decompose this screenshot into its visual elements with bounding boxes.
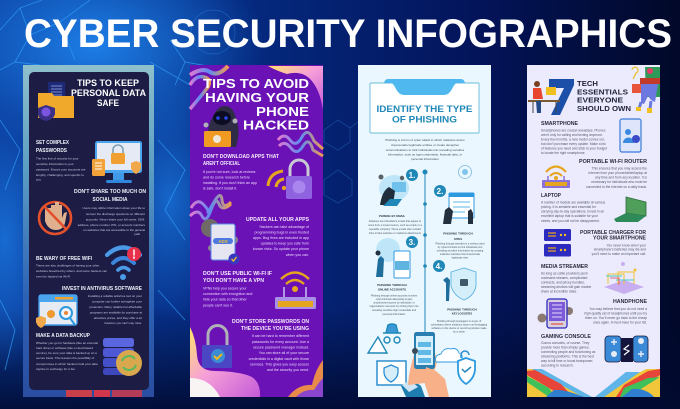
- icon: folder with shield: [38, 82, 74, 121]
- text: update all your apps: apps. Bug fixes are included in app: [253, 236, 309, 240]
- text: phishing definition: impersonate legitimate entities or create deceptive: [391, 143, 459, 147]
- icon: router: [275, 272, 316, 309]
- text: update all your apps: updates to keep you safe from: [261, 242, 309, 246]
- step 4: phishing through keyloggers: [431, 260, 488, 334]
- item: laptop: pricing. It is sensible and essential for: [541, 205, 597, 209]
- item: smartphone: aren't only for calling and texting anymore.: [541, 133, 603, 137]
- text: be wary of free wifi: These are also challenges of having your other: [36, 264, 99, 268]
- text: phishing definition: information, such as login credentials, financial data, or: [388, 152, 462, 156]
- text: don't use public wi-fi: DON'T USE PUBLIC WI-FI IF: [203, 271, 273, 277]
- text: don't use public wi-fi: hide your data so that other: [203, 298, 248, 302]
- text: set complex passwords: sensitive information is your: [36, 162, 74, 166]
- item: smartphone: of features you need and stick to your budget: [541, 146, 607, 150]
- item: laptop: carrying day-to-day operations. Invest in an: [541, 210, 604, 214]
- step 1: phishing by email: 1.: [409, 171, 415, 180]
- text: set complex passwords: you.: [36, 178, 42, 182]
- item: handphone: HANDPHONE: [613, 299, 648, 305]
- text: don't share too much on social media: Users may utilize information about your life to: [82, 206, 145, 210]
- step 3: phishing through online accounts: revealing sensitive login credentials and: [372, 309, 417, 312]
- step 1: phishing by email: [368, 169, 422, 235]
- step 4: phishing through keyloggers: cyberattack where malicious actors use keylogging: [431, 324, 488, 326]
- title frame: OF PHISHING: [392, 114, 457, 126]
- text: update all your apps: programming bugs in even trusted: [254, 230, 309, 234]
- text: don't share too much on social media: SOCIAL MEDIA: [92, 197, 128, 203]
- icon: media streamer illustration: [604, 262, 644, 294]
- text: don't download apps: installing. If you don't think an app: [203, 181, 257, 185]
- item: handphone: high-quality set of headphones until you try: [584, 312, 647, 316]
- item: gaming console: way to kill time or boost brainpower,: [541, 359, 593, 363]
- heading: panel 1 title: TIPS TO KEEP: [77, 78, 140, 89]
- text: don't store passwords: You can store all of your secure: [259, 351, 309, 355]
- step 1: phishing by email: come from a trusted source, such as a bank or a: [368, 224, 422, 227]
- step 4: phishing through keyloggers: PHISHING THROUGH: [447, 308, 477, 312]
- text: don't use public wi-fi: [203, 271, 273, 308]
- item: media streamer: contracts, and pricey bundles,: [541, 280, 585, 284]
- title frame: IDENTIFY THE TYPE: [376, 104, 472, 115]
- item: portable wi-fi router: [579, 159, 647, 189]
- text: don't share too much on social media: recover the discharge questions on different: [86, 212, 145, 216]
- item: laptop: [541, 193, 605, 223]
- item: gaming console: Gonna consoles, of course. They: [541, 341, 590, 345]
- step 1: phishing by email: Attackers send fraudulent emails that appear to: [369, 220, 422, 223]
- decoration: bottom blobs: [190, 327, 323, 397]
- panel: 7 tech essentials: [527, 65, 660, 397]
- text: don't share too much on social media: [74, 189, 146, 236]
- step 2: phishing through sites: revealing sensitive information by creating: [437, 250, 484, 252]
- text: set complex passwords: PASSWORDS: [36, 148, 68, 154]
- icon: big seven with person at desk: [528, 79, 574, 115]
- item: smartphone: Every few months, a new model comes out,: [541, 138, 605, 142]
- text: don't share too much on social media: path.: [134, 232, 141, 236]
- item: gaming console: [541, 334, 596, 368]
- icon: target: [458, 166, 472, 178]
- item: portable charger: smartphone's batteries may die and: [594, 248, 646, 252]
- item: media streamer: [541, 264, 591, 294]
- text: make a data backup: compromises in which hackers hold your data: [36, 362, 98, 366]
- text: update all your apps: known risks. So update your phone: [253, 247, 309, 251]
- text: set complex passwords: lengthy, challenging, and specific to: [36, 173, 84, 177]
- icon: router: [542, 166, 570, 188]
- text: don't use public wi-fi: people can't see it.: [203, 304, 233, 308]
- step 2: phishing through sites: 2.: [437, 187, 443, 196]
- title frame: [370, 79, 479, 133]
- heading: tech essentials title: SHOULD OWN: [577, 106, 631, 113]
- timeline: [422, 170, 428, 334]
- text: don't share too much on social media: address, phone number, PIN, or account numbers: [78, 223, 145, 227]
- text: be wary of free wifi: [36, 256, 107, 278]
- heading: panel 1 title: [71, 78, 146, 109]
- icon: game console: [605, 336, 648, 362]
- item: gaming console: GAMING CONSOLE: [541, 334, 592, 340]
- item: portable charger: [580, 230, 647, 256]
- step 4: phishing through keyloggers: KEYLOGGERS: [452, 312, 472, 316]
- text: don't store passwords: credentials in a digital vault with those: [249, 357, 309, 361]
- item: media streamer: MEDIA STREAMER: [541, 264, 588, 270]
- text: don't store passwords: passwords for every account. Use a: [252, 340, 309, 344]
- item: gaming console: according to research.: [541, 364, 574, 368]
- item: smartphone: Smartphones are crucial nowadays. Phones: [541, 128, 606, 132]
- item: laptop: A number of models are available at various: [541, 200, 605, 204]
- text: don't use public wi-fi: connection with encryption and: [203, 292, 252, 296]
- item: media streamer: streaming devices will gain market: [541, 285, 591, 289]
- text: don't store passwords: secure password manager instead.: [253, 346, 309, 350]
- step 3: phishing through online accounts: [370, 236, 419, 316]
- text: set complex passwords: password. Ensure your accounts are: [36, 168, 86, 172]
- item: handphone: You may believe that you do not need a: [589, 307, 647, 311]
- decoration: middle wave: [190, 195, 231, 219]
- step 3: phishing through online accounts: personal information: [383, 313, 406, 316]
- step 3: phishing through online accounts: ONLINE ACCOUNTS: [378, 288, 406, 292]
- step 2: phishing through sites: malicious websites that impersonate: [440, 253, 481, 256]
- decoration: bottom colored blocks: [527, 369, 660, 397]
- icon: blue padlock: [202, 326, 232, 368]
- text: update all your apps: [246, 217, 309, 257]
- text: don't use public wi-fi: VPNs help you secure your: [203, 286, 247, 290]
- step 1: phishing by email: links to fake websites or malicious attachments: [369, 232, 422, 235]
- text: make a data backup: MAKE A DATA BACKUP: [36, 333, 91, 339]
- step 2: phishing through sites: [434, 185, 485, 260]
- text: invest in antivirus software: programs are available for purchase at: [90, 310, 142, 314]
- step 2: phishing through sites: SITES: [454, 237, 462, 241]
- item: portable charger: you'll need to make an important call.: [592, 252, 646, 256]
- item: handphone: them on. You'll never go back to the cheap: [585, 316, 647, 320]
- icon: stop hand: [39, 202, 71, 234]
- heading: panel 1 title: SAFE: [97, 98, 120, 109]
- item: media streamer: share at incredible rates.: [541, 290, 577, 294]
- text: don't use public wi-fi: YOU DON'T HAVE A VPN: [203, 278, 264, 284]
- step 3: phishing through online accounts: organizations' accounts by tricking them into: [370, 305, 419, 308]
- item: portable charger: YOUR SMARTPHONE: [593, 236, 647, 242]
- item: portable charger: PORTABLE CHARGER FOR: [580, 230, 646, 236]
- text: update all your apps: when you can.: [286, 253, 309, 257]
- step 1: phishing by email: reputable company. These emails often contain: [369, 228, 422, 231]
- text: don't download apps: [203, 154, 280, 190]
- text: invest in antivirus software: computer can further strengthen your: [92, 300, 142, 304]
- heading: tech essentials title: EVERYONE: [577, 98, 623, 104]
- icon: database backup: [103, 338, 142, 376]
- text: phishing definition: personal information: [411, 157, 439, 161]
- text: set complex passwords: [36, 140, 86, 182]
- step 2: phishing through sites: Phishing through websites is a method used: [436, 242, 485, 246]
- text: invest in antivirus software: features you can't say miss.: [104, 321, 142, 325]
- icon: hooded hacker with laptop: [204, 106, 238, 147]
- step 3: phishing through online accounts: cybercriminals attempting to gain: [376, 298, 413, 301]
- text: don't download apps: DON'T DOWNLOAD APPS THAT: [203, 154, 280, 160]
- step 1: phishing by email: PHISING BY EMAIL: [379, 214, 405, 218]
- icon: gear and update document: ADS: [218, 239, 228, 244]
- step 3: phishing through online accounts: PHISHING THROUGH: [377, 283, 407, 287]
- heading: panel 2 title: [203, 77, 309, 132]
- text: make a data backup: service), be sure your data is backed up on a: [36, 351, 97, 355]
- step 4: phishing through keyloggers: by a victim: [453, 330, 465, 334]
- item: smartphone: [541, 121, 607, 155]
- text: be wary of free wifi: BE WARY OF FREE WIFI: [36, 256, 93, 262]
- item: laptop: LAPTOP: [541, 193, 562, 199]
- panel: tips to avoid having your phone hacked: [190, 65, 323, 397]
- heading: panel 1 title: PERSONAL DATA: [71, 88, 146, 99]
- item: laptop: excellent laptop that is suitable for your: [541, 214, 599, 218]
- text: invest in antivirus software: [62, 286, 143, 325]
- text: make a data backup: [36, 333, 98, 371]
- text: don't share too much on social media: accounts. Never share your full name, SSN,: [86, 218, 145, 222]
- text: be wary of free wifi: even be hacked via Wi-Fi.: [36, 274, 71, 278]
- text: don't store passwords: [232, 319, 309, 372]
- heading: tech essentials title: [577, 81, 631, 113]
- text: don't download apps: is safe, don't install it.: [203, 186, 237, 190]
- text: update all your apps: UPDATE ALL YOUR APPS: [246, 217, 309, 223]
- step 4: phishing through keyloggers: 4.: [436, 262, 442, 271]
- text: invest in antivirus software: Installing a reliable antivirus tool on your: [88, 294, 142, 298]
- item: portable wi-fi router: connected to the Internet on a daily basis.: [586, 185, 647, 189]
- item: portable wi-fi router: PORTABLE WI-FI ROUTER: [579, 159, 647, 165]
- text: don't store passwords: and the security you need.: [267, 368, 309, 372]
- heading: panel 2 title: PHONE: [256, 105, 309, 119]
- panel: tips to keep personal data safe: [23, 65, 154, 397]
- text: update all your apps: Hackers can take advantage of: [259, 225, 309, 229]
- item: portable wi-fi router: Internet from your phone/tablet/laptop at: [588, 171, 647, 175]
- item: laptop: needs, and you will not be disappointed.: [541, 219, 600, 223]
- step 3: phishing through online accounts: 3.: [409, 238, 415, 247]
- text: make a data backup: Whether you go for hardware (like an external: [36, 341, 98, 345]
- item: gaming console: streaming platforms. This is the best: [541, 354, 594, 358]
- heading: panel 2 title: TIPS TO AVOID: [203, 77, 309, 91]
- step 2: phishing through sites: legitimate sites: [452, 256, 469, 260]
- decoration: right wave: [278, 132, 323, 156]
- illustration: figure top right: [632, 67, 660, 113]
- text: don't store passwords: services. This gives you easy access: [250, 362, 309, 366]
- text: don't share too much on social media: on websites that are accessible to the general: [83, 228, 145, 232]
- text: don't store passwords: DON'T STORE PASSWORDS ON: [232, 319, 309, 325]
- item: portable charger: You never know when your: [607, 244, 647, 248]
- item: handphone: [584, 299, 648, 324]
- step 3: phishing through online accounts: unauthorized access to individuals' or: [373, 302, 415, 304]
- step 3: phishing through online accounts: Phishing through online accounts involves: [371, 294, 418, 298]
- text: be wary of free wifi: websites breached by others, and some hackers can: [36, 269, 107, 273]
- item: media streamer: As long as cable providers push: [541, 272, 588, 276]
- item: media streamer: codesand streams, complicated: [541, 276, 588, 280]
- icon: gear and update document: [201, 219, 240, 264]
- icon: server blocks: [544, 229, 571, 256]
- item: portable wi-fi router: any time and from any location. It is: [595, 176, 647, 180]
- text: don't download apps: If you're not sure, look at reviews: [203, 170, 256, 174]
- item: smartphone: SMARTPHONE: [541, 121, 579, 127]
- icon: browser with bug and magnifier: [36, 295, 77, 328]
- illustration: hat, warning, monitor, phone, cloud and shield: [368, 324, 475, 397]
- item: smartphone: but don't purchase every update. Make a list: [541, 142, 606, 146]
- text: don't share too much on social media: DON'T SHARE TOO MUCH ON: [74, 189, 146, 195]
- item: handphone: ones again. A must-have for your list.: [593, 320, 647, 324]
- text: don't store passwords: It can be hard to remember different: [252, 334, 309, 338]
- text: set complex passwords: SET COMPLEX: [36, 140, 70, 146]
- icon: wifi warning: [107, 247, 141, 280]
- item: smartphone: to locate the right smartphone.: [541, 151, 586, 155]
- step 4: phishing through keyloggers: software on the device to record keystrokes made: [431, 327, 487, 330]
- text: invest in antivirus software: attractive prices, and they offer a lot: [94, 316, 142, 320]
- text: don't download apps: and do some research before: [203, 176, 250, 180]
- icon: smartphone profile: [620, 119, 641, 152]
- step 4: phishing through keyloggers: Phishing through keyloggers is a type of: [437, 320, 481, 323]
- icon: wifi padlock: [268, 160, 312, 199]
- decoration: top waves: [190, 66, 323, 110]
- heading: tech essentials title: ESSENTIALS: [577, 90, 628, 96]
- text: don't store passwords: THE DEVICE YOU'RE USING: [241, 326, 309, 332]
- text: make a data backup: captive in exchange for a fee.: [36, 367, 76, 371]
- icon: green laptop: [614, 197, 646, 222]
- text: phishing definition: [385, 138, 465, 161]
- text: set complex passwords: The first line of security for your: [36, 156, 79, 160]
- title: CYBER SECURITY INFOGRAPHICS: [24, 12, 672, 56]
- panel: identify the type of phishing: [358, 65, 491, 397]
- heading: tech essentials title: TECH: [577, 81, 598, 88]
- item: portable wi-fi router: necessary for individuals who must be: [591, 180, 647, 184]
- step 2: phishing through sites: PHISHING THROUGH: [443, 232, 473, 236]
- text: phishing definition: Phishing is a form of cyber attack in which malicious actors: [385, 138, 465, 142]
- item: gaming console: connecting people and functioning as: [541, 350, 596, 354]
- step 2: phishing through sites: by cybercriminals to trick individuals into: [438, 246, 483, 249]
- text: phishing definition: communications to trick individuals into revealing sensitive: [386, 148, 465, 152]
- text: invest in antivirus software: INVEST IN ANTIVIRUS SOFTWARE: [62, 286, 143, 292]
- heading: panel 2 title: HACKED: [243, 118, 309, 132]
- icon: handphone device: [538, 299, 573, 328]
- item: portable wi-fi router: This ensures that you may access the: [592, 166, 647, 170]
- heading: panel 2 title: HAVING YOUR: [205, 91, 309, 105]
- item: gaming console: provide more than simply games,: [541, 346, 590, 350]
- text: invest in antivirus software: protection. Many reliable but affordable: [89, 305, 142, 309]
- icon: monitor with padlock: [92, 141, 142, 183]
- text: make a data backup: secure basis. This lessens the possibility of: [36, 356, 94, 360]
- text: don't download apps: AREN'T OFFICIAL: [203, 161, 241, 167]
- text: make a data backup: hard drive) or software (like a cloud-based: [36, 346, 93, 350]
